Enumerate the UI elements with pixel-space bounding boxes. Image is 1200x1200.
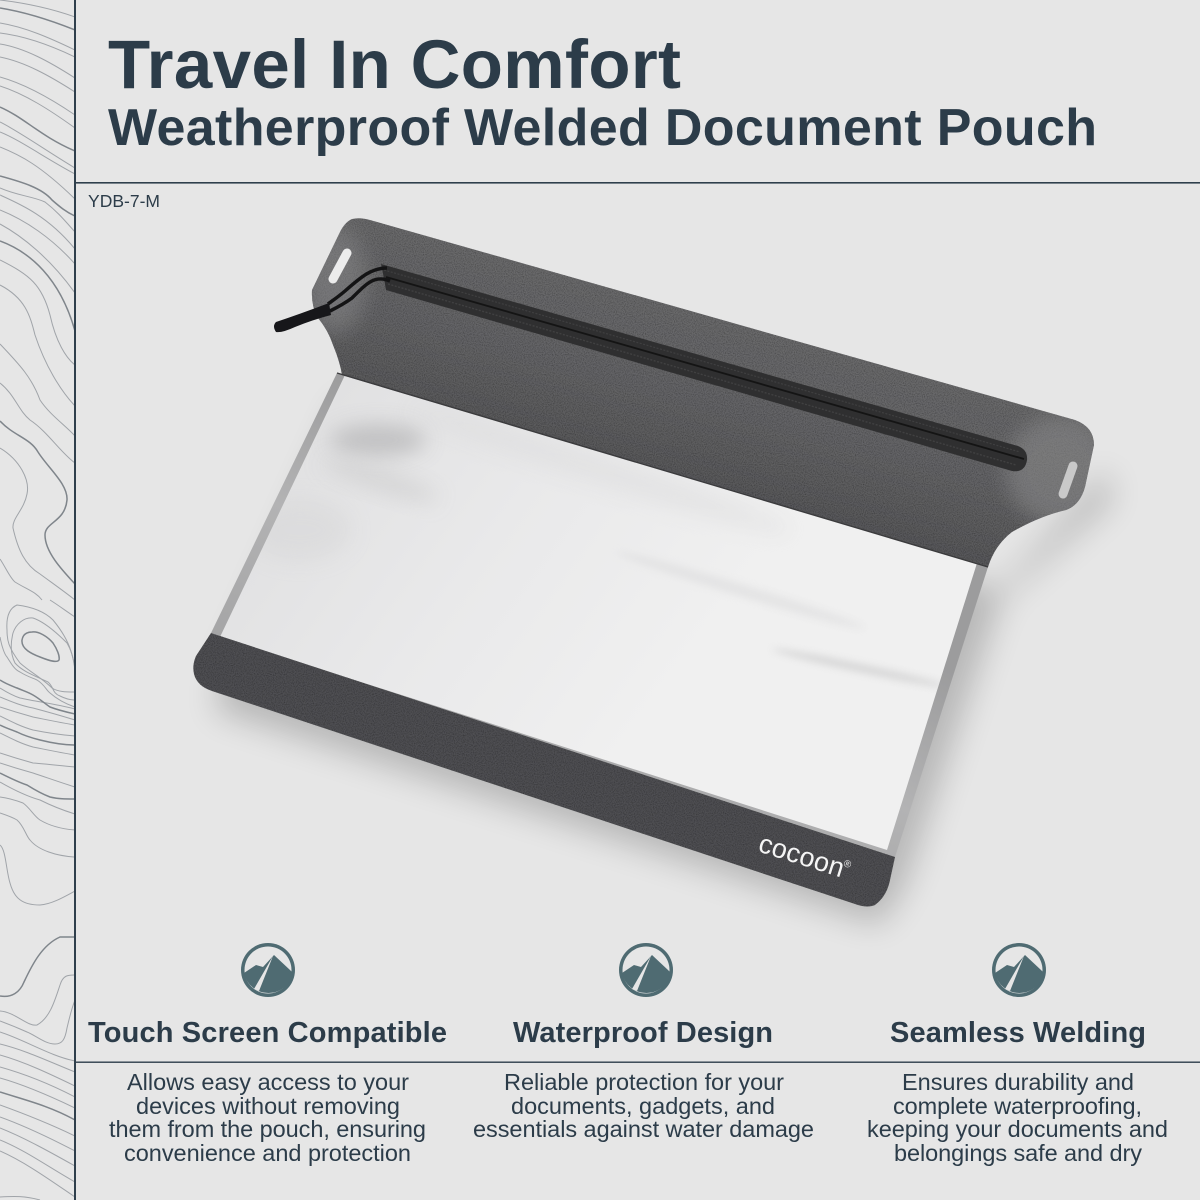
description: Allows easy access to your (127, 1069, 409, 1095)
outer loop (7, 605, 75, 692)
icon: mountain badge (241, 943, 295, 997)
description (473, 1069, 814, 1142)
description: convenience and protection (124, 1140, 411, 1166)
title (108, 26, 1097, 157)
description: belongings safe and dry (894, 1140, 1142, 1166)
subtitle: Weatherproof Welded Document Pouch (108, 99, 1097, 157)
title: Travel In Comfort (108, 26, 681, 103)
frame line: bottom horizontal (75, 1062, 1200, 1063)
middle loop (11, 618, 75, 700)
product code: YDB-7-M (88, 191, 160, 211)
frame line: top horizontal (75, 182, 1200, 184)
heading: Touch Screen Compatible (88, 1017, 447, 1049)
heading: Seamless Welding (890, 1017, 1146, 1049)
zipper pull (274, 268, 390, 332)
description: Ensures durability and (902, 1069, 1134, 1095)
feature: touch screen compatible (88, 943, 447, 1166)
feature: waterproof design (473, 943, 814, 1142)
frame line: vertical (74, 0, 76, 1200)
icon: mountain badge (992, 943, 1046, 997)
description: documents, gadgets, and (511, 1093, 775, 1119)
band seam (337, 373, 988, 567)
zipper (381, 264, 1027, 471)
description (867, 1069, 1168, 1166)
top band (303, 218, 1115, 567)
left hanging slot (333, 253, 347, 279)
description: them from the pouch, ensuring (109, 1116, 426, 1142)
heading: Waterproof Design (513, 1017, 773, 1049)
description (109, 1069, 426, 1166)
pouch shadow (215, 400, 1112, 925)
feature: seamless welding (867, 943, 1168, 1166)
description: devices without removing (136, 1093, 400, 1119)
bottom band (193, 633, 895, 906)
right hanging slot (1063, 466, 1073, 494)
description: keeping your documents and (867, 1116, 1168, 1142)
registered mark: ® (842, 858, 853, 871)
clear window (211, 373, 988, 857)
icon: mountain badge (619, 943, 673, 997)
topographic contour pattern (0, 0, 75, 1200)
product photo: document pouch (193, 218, 1115, 925)
brand logo: cocoon (755, 828, 848, 883)
description: essentials against water damage (473, 1116, 814, 1142)
description: complete waterproofing, (893, 1093, 1142, 1119)
description: Reliable protection for your (504, 1069, 784, 1095)
